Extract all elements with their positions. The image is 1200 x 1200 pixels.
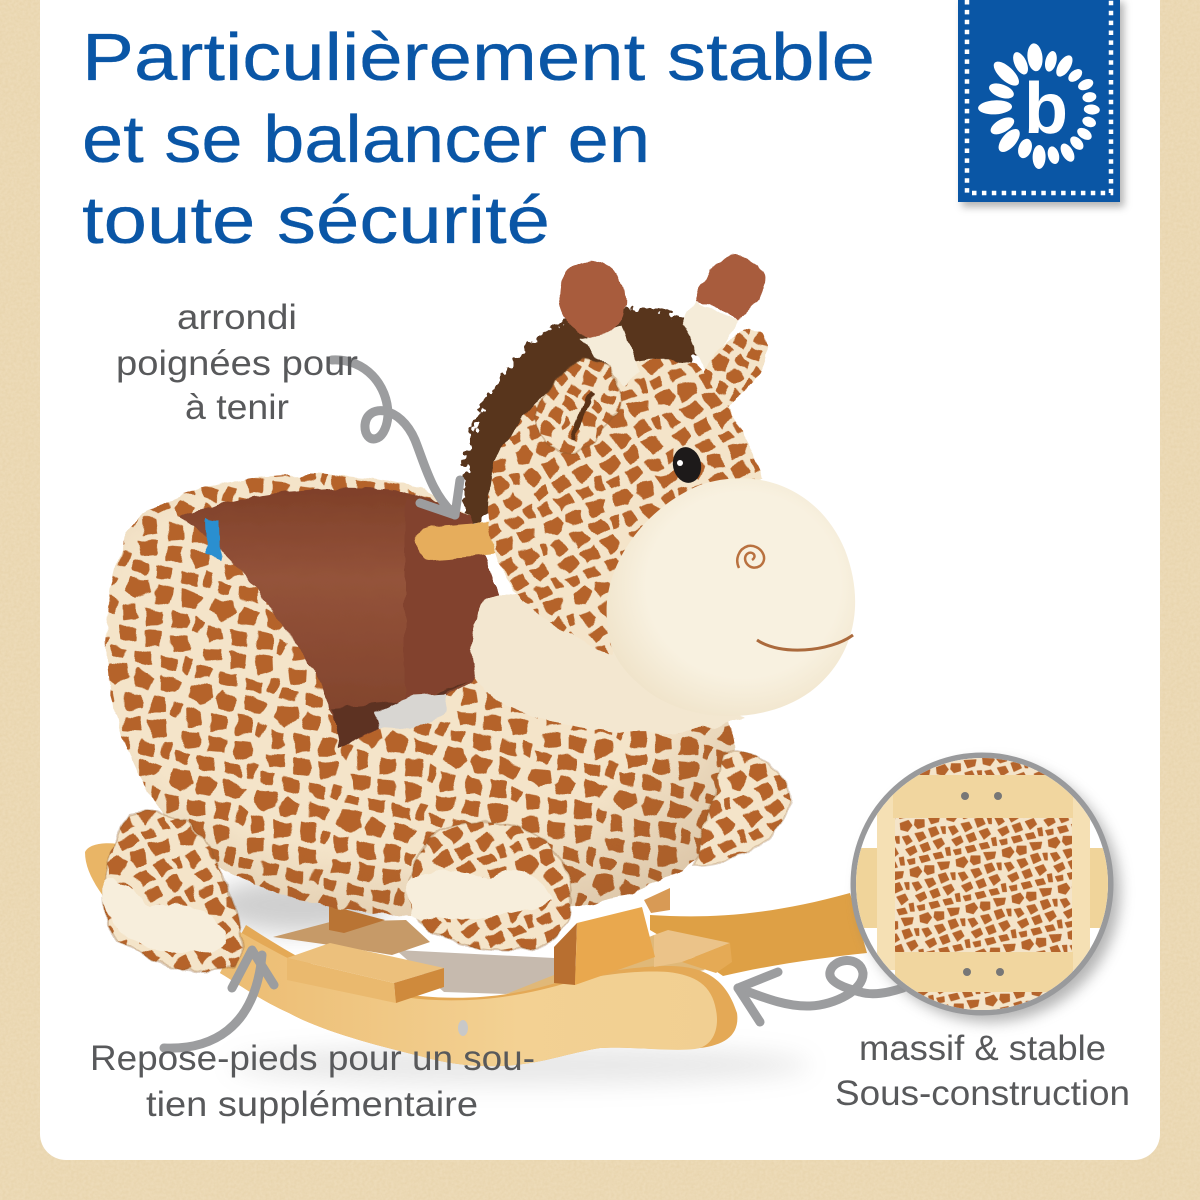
seat shading bbox=[106, 474, 735, 915]
back plank bbox=[273, 920, 430, 955]
hind paw bbox=[695, 752, 791, 865]
logo badge: b bbox=[1024, 69, 1068, 149]
logo badge bbox=[958, 0, 1124, 207]
eye bbox=[670, 444, 704, 486]
label: footrest: tien supplémentaire bbox=[146, 1085, 478, 1124]
ground shadow bbox=[230, 1045, 810, 1085]
label: handles: poignées pour bbox=[116, 344, 358, 383]
rocking giraffe bbox=[85, 254, 867, 1085]
buckle bbox=[376, 693, 447, 730]
back right riser bbox=[644, 888, 670, 913]
plush parts bbox=[102, 254, 791, 970]
label: base: Sous-construction bbox=[835, 1074, 1130, 1113]
left horn stalk bbox=[580, 325, 640, 385]
title bbox=[82, 20, 875, 258]
label: base bbox=[835, 1029, 1130, 1113]
front riser bbox=[554, 907, 655, 985]
label: footrest bbox=[90, 1039, 535, 1124]
back riser bbox=[329, 905, 385, 933]
plank under front riser bbox=[506, 935, 705, 994]
right horn tip bbox=[695, 256, 765, 322]
rear foot pad bbox=[102, 878, 228, 954]
arrow: handle bbox=[332, 360, 460, 515]
muzzle bbox=[607, 478, 855, 716]
interior right panel bbox=[405, 497, 500, 702]
rocker tail bbox=[85, 843, 125, 912]
title: Particulièrement stable bbox=[82, 20, 875, 95]
title: toute sécurité bbox=[82, 183, 550, 258]
label: base: massif & stable bbox=[859, 1029, 1106, 1068]
blue tag bbox=[205, 517, 220, 560]
mane bbox=[463, 308, 698, 524]
rear foot bbox=[103, 812, 242, 970]
main rocker face bbox=[220, 932, 717, 1066]
left ear bbox=[535, 358, 623, 453]
right ear bbox=[703, 329, 767, 407]
title: et se balancer en bbox=[82, 102, 650, 177]
label: handles: arrondi bbox=[177, 298, 297, 337]
screw bbox=[458, 1020, 468, 1036]
arrow: base bbox=[738, 960, 903, 1022]
under shadow bbox=[210, 877, 390, 933]
front foot bbox=[410, 822, 571, 950]
seat interior bbox=[178, 488, 500, 748]
label: footrest: Repose-pieds pour un sou- bbox=[90, 1039, 535, 1078]
inset shadow bbox=[860, 762, 1120, 1022]
right horn stalk bbox=[683, 300, 737, 372]
left horn tip bbox=[552, 254, 632, 342]
seat body bbox=[106, 474, 735, 915]
rocker far side bbox=[650, 893, 867, 976]
gap floor bbox=[396, 950, 554, 994]
right block bbox=[654, 930, 732, 973]
mouth bbox=[757, 635, 853, 650]
inset content bbox=[856, 758, 1108, 1010]
seat floor bbox=[332, 680, 470, 748]
foot rest block bbox=[287, 943, 444, 1003]
main rocker rim bbox=[220, 925, 737, 1066]
handle bbox=[416, 520, 525, 560]
nostril spiral bbox=[737, 546, 764, 568]
inset ring bbox=[854, 756, 1110, 1012]
arrow: footrest bbox=[164, 950, 274, 1048]
label: handles: à tenir bbox=[185, 388, 289, 427]
head bbox=[488, 359, 763, 655]
scarf bbox=[471, 594, 745, 733]
label: handles bbox=[116, 298, 358, 427]
inset circle bbox=[850, 750, 1120, 1022]
front foot pad bbox=[408, 870, 553, 919]
